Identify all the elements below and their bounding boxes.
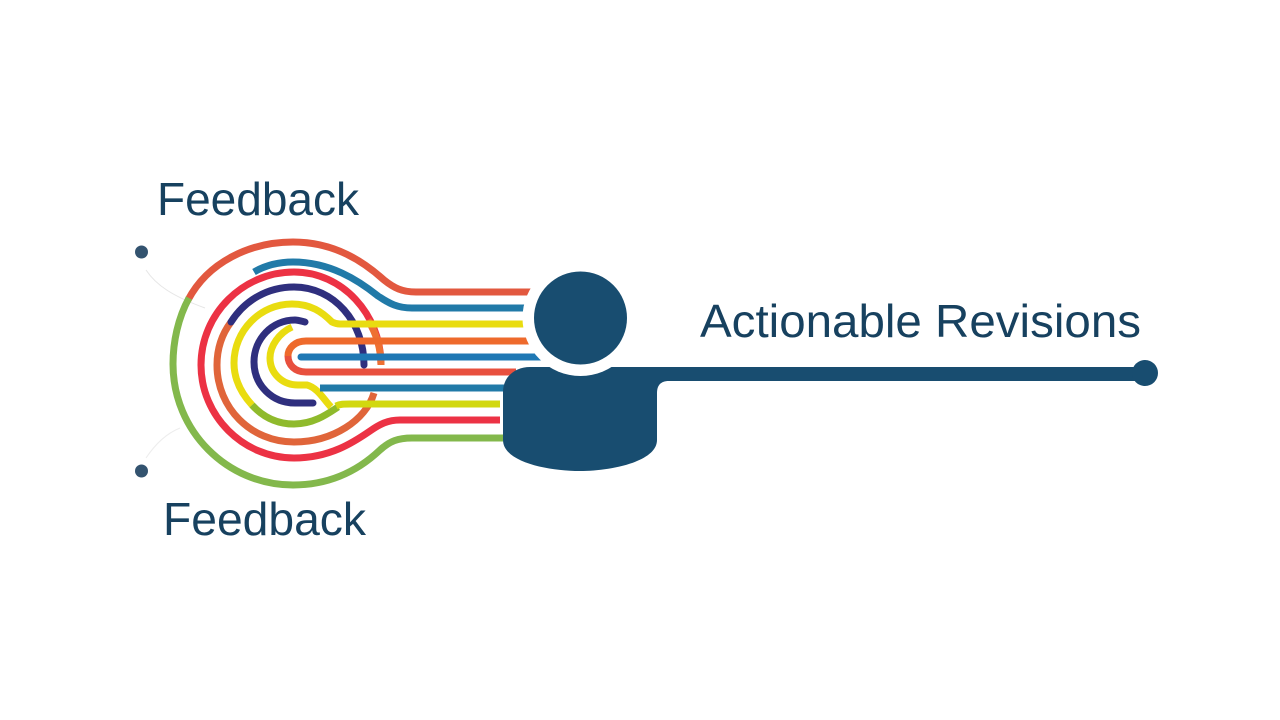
line: orange tail of red ring <box>368 320 381 365</box>
line: green arc into lime <box>252 405 338 424</box>
marker dot: bottom feedback <box>135 464 148 478</box>
line: yellow ring <box>234 304 526 405</box>
line: inner U left and bottom <box>288 356 516 372</box>
line: inner yellow <box>270 327 331 407</box>
line: purple arc <box>231 287 364 365</box>
heading: Feedback bottom: Feedback <box>163 493 367 545</box>
line: blue second <box>254 262 527 308</box>
person head <box>534 272 627 364</box>
line: inner purple C <box>254 320 313 403</box>
faint connector: top feedback <box>146 270 205 308</box>
line: red ring <box>201 272 500 458</box>
icon: person <box>503 260 1140 471</box>
person body and arm <box>503 367 1140 471</box>
line: orange and red inner U top <box>288 341 530 356</box>
marker dot: top feedback <box>135 246 148 258</box>
heading: Actionable Revisions: Actionable Revisions <box>700 295 1141 347</box>
end dot of arm line <box>1132 360 1158 386</box>
heading: Feedback top: Feedback <box>157 173 360 225</box>
line: central blue <box>301 354 540 360</box>
line: orange ring <box>217 322 374 442</box>
line: outer red-orange <box>188 242 533 300</box>
line: lower blue <box>320 384 505 392</box>
line: outer green <box>173 298 503 485</box>
head halo <box>522 260 638 376</box>
faint connector: bottom feedback <box>146 428 180 458</box>
line: lime lower <box>336 404 500 406</box>
concentric feedback lines <box>173 242 540 485</box>
